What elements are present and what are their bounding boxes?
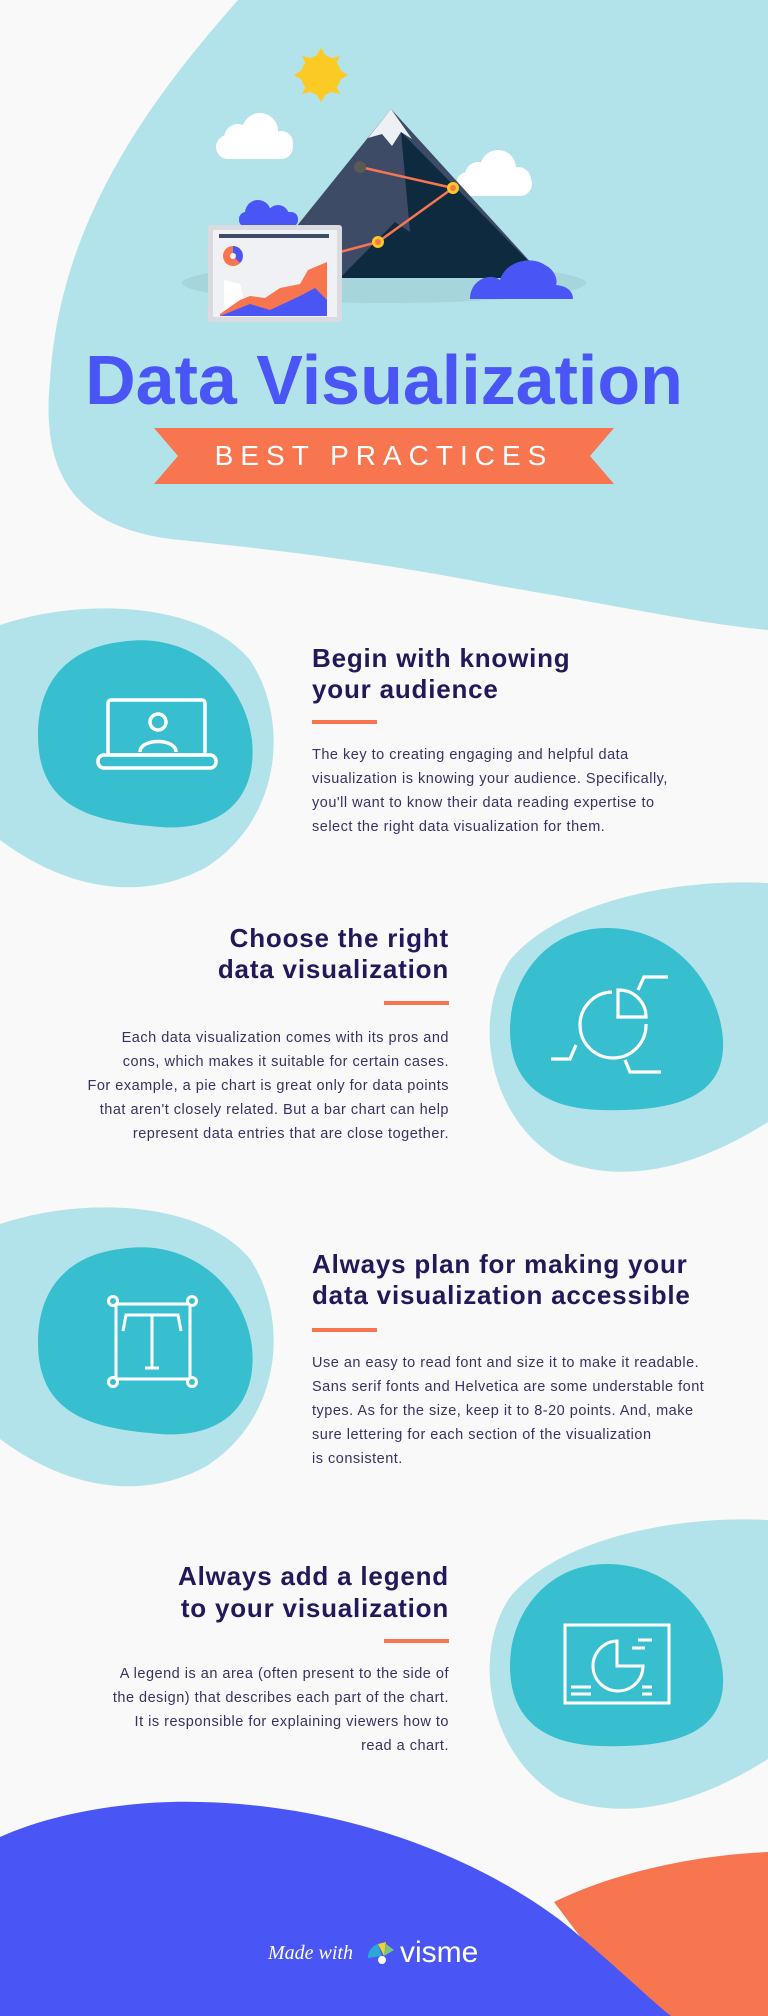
body text: that aren't closely related. But a bar chart can help <box>100 1102 449 1118</box>
body text: The key to creating engaging and helpful data <box>312 747 629 763</box>
body text <box>312 1355 704 1467</box>
body text: visualization is knowing your audience. Specifically, <box>312 771 668 787</box>
body text: Use an easy to read font and size it to make it readable. <box>312 1355 699 1371</box>
heading: Begin with knowing <box>312 643 570 673</box>
body text: represent data entries that are close together. <box>133 1126 449 1142</box>
heading <box>218 923 449 984</box>
heading: Always plan for making your <box>312 1249 688 1279</box>
heading <box>178 1561 449 1623</box>
body text: For example, a pie chart is great only for data points <box>88 1078 449 1094</box>
icon: pie chart <box>510 928 724 1110</box>
ribbon: best practices: BEST PRACTICES <box>215 440 553 471</box>
heading: to your visualization <box>181 1593 449 1623</box>
body text <box>113 1666 449 1754</box>
heading: data visualization <box>218 954 449 984</box>
body text: Sans serif fonts and Helvetica are some understable font <box>312 1379 704 1395</box>
body text <box>312 747 668 835</box>
body text: you'll want to know their data reading expertise to <box>312 795 655 811</box>
body text <box>88 1030 449 1142</box>
body text: the design) that describes each part of the chart. <box>113 1690 449 1706</box>
heading: data visualization accessible <box>312 1280 691 1310</box>
footer: made with visme: Made with <box>268 1942 353 1964</box>
body text: types. As for the size, keep it to 8-20 points. And, make <box>312 1403 694 1419</box>
heading: your audience <box>312 674 499 704</box>
heading: Choose the right <box>230 923 449 953</box>
body text: cons, which makes it suitable for certain cases. <box>123 1054 449 1070</box>
panel: accessible <box>38 1247 704 1467</box>
body text: select the right data visualization for them. <box>312 819 605 835</box>
footer: made with visme: visme <box>400 1936 478 1969</box>
body text: read a chart. <box>361 1738 449 1754</box>
icon: legend chart <box>510 1564 724 1746</box>
body text: A legend is an area (often present to the side of <box>120 1666 449 1682</box>
heading <box>312 1249 691 1310</box>
body text: is consistent. <box>312 1451 403 1467</box>
body text: sure lettering for each section of the visualization <box>312 1427 652 1443</box>
footer: made with visme <box>268 1936 478 1969</box>
panel: legend <box>113 1561 724 1754</box>
panel: choose visualization <box>88 923 724 1142</box>
ribbon: best practices <box>154 428 614 484</box>
panel: audience <box>38 640 668 835</box>
body text: It is responsible for explaining viewers how to <box>135 1714 449 1730</box>
title: Data Visualization <box>85 341 683 419</box>
heading <box>312 643 570 704</box>
body text: Each data visualization comes with its pros and <box>122 1030 449 1046</box>
icon: text frame <box>38 1247 253 1434</box>
hero illustration <box>182 48 586 322</box>
heading: Always add a legend <box>178 1561 449 1591</box>
icon: teal blob with laptop <box>38 640 253 828</box>
icon: visme logo <box>368 1942 394 1964</box>
